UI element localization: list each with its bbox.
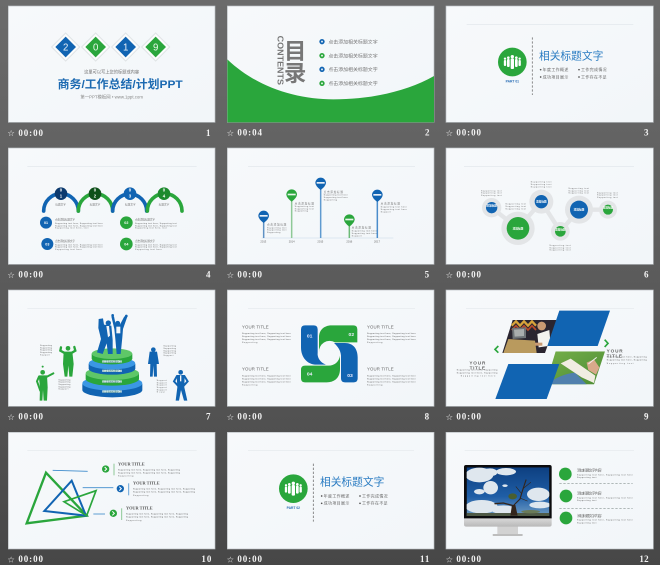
item circles: 04 xyxy=(124,242,129,246)
bubble network: 添加标题 xyxy=(513,227,524,231)
text block right bottom: Supporting xyxy=(367,384,383,387)
triangle graphic xyxy=(27,473,96,523)
footer time xyxy=(446,554,649,564)
podium notes: Supporting xyxy=(58,383,71,386)
podium notes: Supporting xyxy=(163,352,177,355)
timeline notes: Support xyxy=(352,234,362,237)
timeline notes: 点击添加标题 xyxy=(352,225,371,229)
text block right: YOUR xyxy=(607,348,623,353)
timeline notes: 点击添加标题 xyxy=(324,190,343,194)
footer time: ☆ xyxy=(7,554,15,564)
text block left top: Supporting text here, Supporting text here xyxy=(242,338,291,341)
timeline notes: Supporting text xyxy=(267,229,287,232)
podium notes: Support xyxy=(157,386,167,389)
item text: Supporting text here, Supporting text here xyxy=(55,246,103,249)
podium notes: Supporting xyxy=(40,351,53,354)
arc number badges: 3 xyxy=(129,193,132,198)
item text: Supporting text here, Supporting text here xyxy=(55,224,103,227)
text block 1: Supporting text here, Supporting text here, Supporting xyxy=(118,471,181,474)
item circles: 03 xyxy=(45,242,49,246)
item text: 点击添加标题文字 xyxy=(135,239,155,243)
section list: 成功项目展示 xyxy=(324,500,349,506)
footer time xyxy=(7,412,211,422)
arc number badges xyxy=(55,187,170,200)
timeline notes: Supporting text here xyxy=(352,232,377,235)
timeline notes: Supporting text here xyxy=(352,230,377,233)
text block left top xyxy=(242,324,291,344)
podium notes: Supporting xyxy=(40,346,53,349)
bubble notes: Supporting text xyxy=(549,249,571,252)
panel: slide 1 cover xyxy=(7,6,215,138)
footer time: ☆ xyxy=(446,554,453,564)
podium notes: Support xyxy=(157,381,167,384)
feature text 3: Supporting text xyxy=(577,521,597,524)
footer time: ☆ xyxy=(7,412,15,422)
item circles: 01 xyxy=(44,221,48,225)
podium notes: Supporting xyxy=(58,385,71,388)
footer time: ☆ xyxy=(227,128,234,138)
footer time: ☆ xyxy=(446,412,453,422)
section list xyxy=(321,492,388,506)
arc labels: 标题文字 xyxy=(90,203,101,207)
footer time: 00:00 xyxy=(456,270,481,280)
arc chain xyxy=(44,194,182,211)
arrow right xyxy=(605,340,608,347)
bubble network: 添加标题 xyxy=(536,200,547,204)
silhouettes: blue men xyxy=(148,347,188,401)
text block right top: Supporting text here, Supporting text here xyxy=(367,338,416,341)
footer time: ☆ xyxy=(227,554,234,564)
text block right bottom: Supporting text here, Supporting text here xyxy=(367,375,416,378)
footer time xyxy=(446,412,649,422)
footer time xyxy=(7,128,211,138)
podium notes: Support xyxy=(157,388,167,391)
bubble network: 添加标题 xyxy=(555,228,566,232)
text block 3: Supporting text here, Supporting text here, Supporting xyxy=(126,512,189,515)
year diamonds 2019 xyxy=(52,33,170,61)
bubble notes: Supporting text xyxy=(531,185,552,188)
timeline notes: 点击添加标题 xyxy=(295,201,314,205)
item text: Supporting text here, Supporting text xyxy=(135,246,177,249)
text block left xyxy=(457,361,498,378)
footer time xyxy=(227,128,430,138)
feature text 3: 添加标题文字内容 xyxy=(577,513,602,518)
text block 2: YOUR TITLE xyxy=(133,480,160,485)
timeline notes: Supporting xyxy=(324,198,338,201)
footer time: 12 xyxy=(639,554,649,564)
photo: writing on notebook xyxy=(552,351,605,384)
footer time: 7 xyxy=(206,412,211,422)
knot shapes: 04 xyxy=(307,372,313,378)
bubble notes: Supporting text xyxy=(549,246,571,249)
footer time: 00:00 xyxy=(18,128,43,138)
podium notes: Supporting xyxy=(40,344,53,347)
heading 目录: 录 xyxy=(284,61,306,86)
bubble notes: Supporting text xyxy=(481,189,502,192)
year diamonds 2019: 1 xyxy=(123,42,128,53)
footer time: 00:00 xyxy=(18,270,43,280)
bubble notes: Supporting text xyxy=(597,196,618,199)
text block 3 xyxy=(126,505,189,522)
timeline notes: 点击添加标题 xyxy=(381,201,400,205)
text block right xyxy=(607,348,647,365)
contents list: 点击添加相关标题文字 xyxy=(328,38,378,45)
item text: Supporting text here, Supporting text here xyxy=(55,243,103,246)
text block left top: Supporting text here, Supporting text here xyxy=(242,335,291,338)
footer time: 00:04 xyxy=(237,128,262,138)
feature text 2: Supporting text xyxy=(577,499,597,502)
timeline years: 2014 xyxy=(289,240,295,244)
footer time xyxy=(227,412,430,422)
text block right: Supporting text xyxy=(607,362,634,365)
text block left bottom: Supporting xyxy=(242,384,258,387)
bubble notes: Supporting text xyxy=(505,207,526,210)
bubble notes: Supporting text xyxy=(568,187,589,190)
bubble network: 添加标题 xyxy=(603,205,614,209)
contents list: 点击添加相关标题文字 xyxy=(328,52,378,59)
podium notes: Support xyxy=(58,388,69,391)
heading 目录: CONTENTS xyxy=(275,36,285,85)
arc number badges: 1 xyxy=(60,193,63,198)
timeline notes: Supporting text xyxy=(267,226,287,229)
text block right top: Supporting text here, Supporting text here xyxy=(367,335,416,338)
footer time: ☆ xyxy=(7,128,15,138)
footer time: 00:00 xyxy=(237,412,262,422)
text block 1: Supporting text here, Supporting text here, Supporting xyxy=(118,468,181,471)
podium notes: Support xyxy=(40,353,50,356)
arc number badges: 0 xyxy=(163,188,166,193)
arc number badges: 0 xyxy=(94,188,97,193)
footer time: 8 xyxy=(425,412,430,422)
footer time xyxy=(227,554,430,564)
feature text 2: 添加标题文字内容 xyxy=(577,490,602,495)
podium notes: Supporting xyxy=(40,349,53,352)
text block left bottom: Supporting text here, Supporting text here xyxy=(242,375,291,378)
footer time: 00:00 xyxy=(237,270,262,280)
podium notes: Supporting xyxy=(58,378,71,381)
footer time xyxy=(227,270,430,280)
bubble notes: Supporting text xyxy=(505,203,526,206)
panel: slide 12 monitor xyxy=(446,432,653,564)
knot shapes: 03 xyxy=(347,373,353,379)
text block right: Supporting text here, Supporting xyxy=(607,356,647,359)
text block right top: Supporting text here, Supporting text here xyxy=(367,332,416,335)
text block left: YOUR xyxy=(469,361,486,366)
panel: slide 8 four-part knot xyxy=(227,290,434,422)
text block right: TITLE xyxy=(607,353,622,358)
text block 2: Supporting xyxy=(133,494,149,497)
text block 3: Supporting xyxy=(126,519,142,522)
timeline notes: Supporting text xyxy=(295,207,314,210)
bubble notes: Supporting text xyxy=(597,194,618,197)
footer time: ☆ xyxy=(7,270,15,280)
bubble notes: Supporting text xyxy=(481,194,502,197)
green markers xyxy=(559,468,572,524)
item text: Supporting text here, text xyxy=(135,227,167,230)
podium notes: Supp xyxy=(157,392,165,394)
section list: 工作存在不足 xyxy=(362,500,388,506)
monitor photo xyxy=(465,467,551,516)
feature text 3: Supporting text here, Supporting text here xyxy=(577,519,633,522)
feature text 2 xyxy=(577,490,633,502)
podium tiers: 点击添加标题文字 xyxy=(103,389,122,393)
arc number badges: 4 xyxy=(163,193,166,198)
footer time: 00:00 xyxy=(456,412,481,422)
section list xyxy=(540,66,607,79)
knot shapes: 01 xyxy=(307,333,313,339)
text block left: TITLE xyxy=(470,366,485,371)
footer time: ☆ xyxy=(446,128,453,138)
icon: people circle xyxy=(279,474,308,503)
item text: Supporting text here xyxy=(135,248,162,251)
footer time: 10 xyxy=(201,554,212,564)
bubble network: 添加标题 xyxy=(486,203,497,207)
arc labels: 标题文字 xyxy=(159,203,170,207)
text block left: Supporting text here, Supporting xyxy=(457,371,498,374)
text block 2: Supporting text here, Supporting text here, Supporting xyxy=(133,487,196,490)
podium tiers: 点击添加标题文字 xyxy=(103,369,122,373)
footer time xyxy=(7,270,211,280)
timeline notes: Support xyxy=(381,210,391,213)
item text: Supporting text here, text xyxy=(55,227,89,230)
item text: Supporting text here, Supporting text xyxy=(135,222,177,225)
subtitle: 这里可以写上您的标题或内容 xyxy=(84,68,139,75)
timeline years: 2017 xyxy=(374,240,380,244)
timeline notes: Supporting text xyxy=(295,205,314,208)
website line: 第一PPT模板网 • www.1ppt.com xyxy=(80,94,143,101)
feature text 1: Supporting text xyxy=(577,476,597,479)
podium notes: Support xyxy=(163,354,174,357)
section title: 相关标题文字 xyxy=(320,476,384,489)
timeline pins xyxy=(258,178,383,227)
part label: PART 01 xyxy=(506,80,519,84)
podium notes: Supporting xyxy=(58,381,71,384)
timeline notes: Supporting text here xyxy=(324,194,348,197)
text block left bottom: Supporting text here, Supporting text here xyxy=(242,378,291,381)
blue parallelogram top xyxy=(547,311,610,346)
text block left top: Supporting xyxy=(242,341,258,344)
text block left: Supporting text here, Supporting xyxy=(457,368,498,371)
heading 目录: 目 xyxy=(284,39,306,64)
footer time: 00:00 xyxy=(456,128,481,138)
item text: 点击添加标题文字 xyxy=(55,218,75,222)
blue parallelogram bottom xyxy=(495,364,559,399)
text block 2: Supporting text here, Supporting text here, Supporting xyxy=(133,491,196,494)
text block 1: Supporting xyxy=(118,475,134,478)
bubble notes: Supporting text xyxy=(505,205,526,208)
arc number badges: 0 xyxy=(60,188,63,193)
arc number badges: 0 xyxy=(129,188,132,193)
arc labels xyxy=(55,203,170,207)
text block 1 xyxy=(118,461,181,478)
bubble notes: Supporting text xyxy=(597,191,618,194)
footer time xyxy=(7,554,212,564)
year diamonds 2019: 0 xyxy=(93,42,98,53)
footer time: 00:00 xyxy=(237,554,262,564)
text block 3: Supporting text here, Supporting text here, Supporting xyxy=(126,516,189,519)
arrow badges xyxy=(102,465,124,517)
timeline years: 2015 xyxy=(317,240,324,244)
timeline years: 2013 xyxy=(260,240,267,244)
footer time: ☆ xyxy=(227,412,234,422)
panel: slide 10 triangles xyxy=(7,432,215,564)
timeline notes: Supporting xyxy=(267,231,281,234)
text block 3: YOUR TITLE xyxy=(126,505,153,510)
podium tiers xyxy=(82,348,142,397)
silhouettes: green men xyxy=(37,346,75,401)
footer time: 1 xyxy=(206,128,211,138)
text block right top: Supporting xyxy=(367,341,383,344)
timeline stems xyxy=(264,187,377,238)
arrow left xyxy=(495,346,498,353)
text block left bottom: YOUR TITLE xyxy=(242,367,269,372)
contents list xyxy=(319,38,378,87)
connector lines xyxy=(53,470,113,514)
icon: people circle xyxy=(498,48,527,76)
text block right bottom xyxy=(367,367,416,387)
text block left: Supporting text here xyxy=(461,375,496,378)
footer time: 3 xyxy=(644,128,649,138)
podium notes xyxy=(40,344,177,394)
section list: 年度工作概述 xyxy=(324,492,349,498)
text block left bottom xyxy=(242,367,291,387)
text block right bottom: Supporting text here, Supporting text here xyxy=(367,378,416,381)
main title: 商务/工作总结/计划PPT xyxy=(58,77,183,91)
bubble notes: Supporting text xyxy=(568,189,589,192)
item text: Supporting text here, Supporting text xyxy=(135,243,177,246)
contents list: 点击添加相关标题文字 xyxy=(328,66,378,73)
panel: slide 5 timeline xyxy=(227,148,434,280)
part label: PART 02 xyxy=(287,506,300,510)
podium notes: Supporting xyxy=(163,347,177,350)
footer time xyxy=(446,270,649,280)
photo: man with laptop xyxy=(502,320,558,353)
panel: slide 9 photos xyxy=(446,290,653,422)
green curve xyxy=(227,59,434,122)
item circles: 02 xyxy=(124,221,128,225)
text block right: Supporting text here, Supporting xyxy=(607,359,647,362)
footer time: 11 xyxy=(420,554,430,564)
footer time: 00:00 xyxy=(456,554,481,564)
panel: slide 7 podium xyxy=(7,290,215,422)
timeline notes: 点击添加标题 xyxy=(267,223,287,227)
section list: 成功项目展示 xyxy=(543,73,568,79)
heading 目录 xyxy=(275,36,306,86)
text block left top: Supporting text here, Supporting text here xyxy=(242,332,291,335)
year diamonds 2019: 2 xyxy=(63,42,68,53)
bubble notes: Supporting text xyxy=(481,192,502,195)
section list: 工作完成情况 xyxy=(362,492,388,498)
footer time: 2 xyxy=(425,128,430,138)
footer time: 5 xyxy=(425,270,430,280)
podium notes: Support xyxy=(157,379,167,382)
arc number badges: 2 xyxy=(94,193,97,198)
arc labels: 标题文字 xyxy=(125,203,136,207)
panel: slide 3 section xyxy=(446,6,653,138)
contents list: 点击添加相关标题文字 xyxy=(328,80,378,87)
text block 1: YOUR TITLE xyxy=(118,461,145,466)
timeline notes: Supporting text here xyxy=(381,208,407,211)
timeline notes: Supporting text here xyxy=(381,206,407,209)
bubble notes: Supporting text xyxy=(549,244,571,247)
panel: slide 11 section xyxy=(227,432,434,564)
section list: 工作存在不足 xyxy=(581,73,607,79)
timeline years: 2016 xyxy=(346,240,353,244)
footer time: ☆ xyxy=(227,270,234,280)
bubble notes: Supporting text xyxy=(531,183,552,186)
bubble network xyxy=(482,190,617,245)
arc labels: 标题文字 xyxy=(55,203,66,207)
footer time: 00:00 xyxy=(18,554,43,564)
timeline years xyxy=(260,240,380,244)
footer time: 6 xyxy=(644,270,649,280)
text block left bottom: Supporting text here, Supporting text here xyxy=(242,381,291,384)
panel: slide 2 contents xyxy=(227,6,434,138)
podium notes: Supporting xyxy=(163,349,177,352)
section list: 年度工作概述 xyxy=(543,66,568,72)
section title: 相关标题文字 xyxy=(539,49,603,62)
panel: slide 6 bubbles xyxy=(446,148,653,280)
feature text 1: Supporting text here, Supporting text here xyxy=(577,473,633,476)
text block right bottom: Supporting text here, Supporting text here xyxy=(367,381,416,384)
monitor xyxy=(464,465,552,536)
knot shapes xyxy=(301,325,358,382)
footer time: ☆ xyxy=(446,270,453,280)
timeline notes: Supporting text here xyxy=(324,196,348,199)
vertical bars xyxy=(114,464,129,520)
item circles xyxy=(40,216,133,250)
text block right bottom: YOUR TITLE xyxy=(367,367,394,372)
podium notes: Supporting xyxy=(163,345,177,348)
section list: 工作完成情况 xyxy=(581,66,607,72)
item text: Supporting text here, Supporting text xyxy=(135,224,177,227)
feature text 1: 添加标题文字内容 xyxy=(577,467,602,472)
text block right top xyxy=(367,324,416,344)
knot shapes: 02 xyxy=(349,332,354,338)
item text: 点击添加标题文字 xyxy=(135,218,155,222)
footer time: 4 xyxy=(206,270,211,280)
footer time: 00:00 xyxy=(18,412,43,422)
item text xyxy=(55,218,177,251)
silhouettes: winners xyxy=(97,314,128,354)
text block left top: YOUR TITLE xyxy=(242,324,269,329)
bubble notes: Supporting text xyxy=(568,192,589,195)
item text: 点击添加标题文字 xyxy=(55,239,75,243)
panel: slide 4 arcs xyxy=(7,148,215,280)
podium tiers: 点击添加标题文字 xyxy=(103,359,122,363)
footer time: 9 xyxy=(644,412,649,422)
podium notes: Support xyxy=(157,384,167,387)
footer time xyxy=(446,128,649,138)
podium tiers: 点击添加标题文字 xyxy=(103,379,122,383)
text block right top: YOUR TITLE xyxy=(367,324,394,329)
text block 2 xyxy=(133,480,196,497)
year diamonds 2019: 9 xyxy=(153,42,158,53)
feature text 3 xyxy=(577,513,633,524)
bubble notes: Supporting text xyxy=(531,181,552,184)
feature text 1 xyxy=(577,467,633,479)
feature text 2: Supporting text here, Supporting text here xyxy=(577,496,633,499)
item text: Supporting text here, Supporting text here xyxy=(55,222,103,225)
item text: Supporting text here xyxy=(55,248,82,251)
bubble notes xyxy=(481,181,618,252)
timeline notes xyxy=(267,190,407,237)
bubble network: 添加标题 xyxy=(574,208,585,212)
timeline notes: Supporting xyxy=(295,210,309,213)
